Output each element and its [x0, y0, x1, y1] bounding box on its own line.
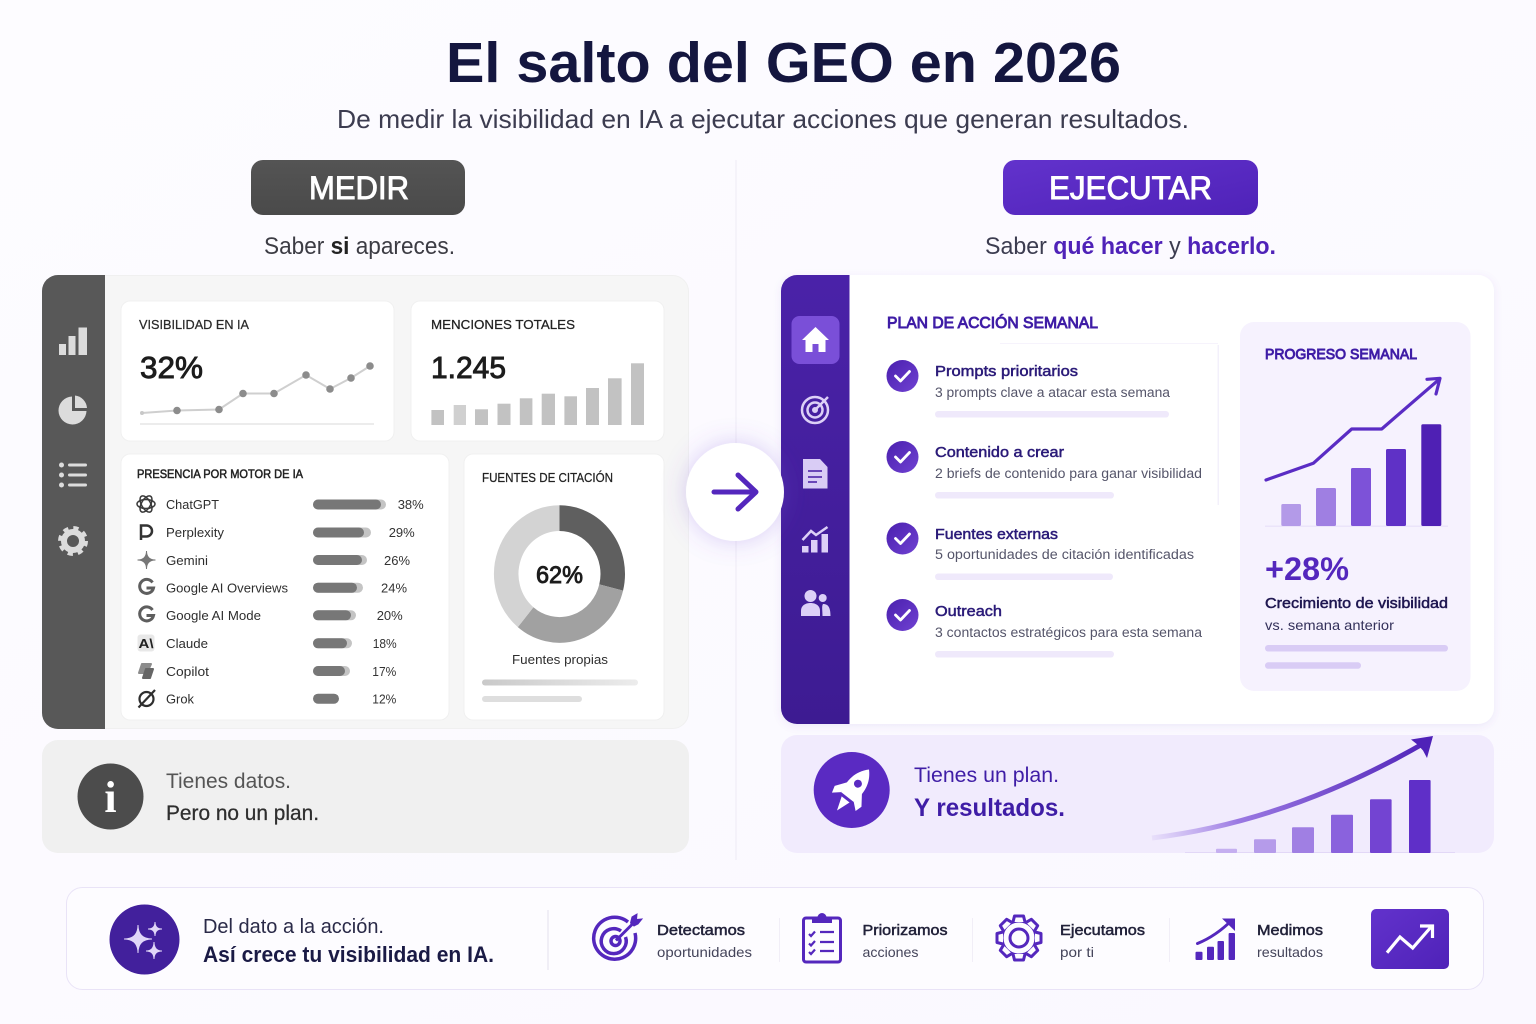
badge: MEDIR: MEDIR: [309, 170, 409, 206]
icon: sparkles: [110, 904, 180, 974]
banner: del dato a la acción: Así crece tu visibilidad en IA.: [203, 942, 494, 967]
row: Claude: [138, 634, 397, 652]
step: ejecutamos: [997, 916, 1145, 960]
step: ejecutamos: Ejecutamos: [1060, 922, 1145, 939]
bar chart: [431, 363, 644, 425]
icon: home: [792, 316, 840, 364]
row: Gemini: [138, 551, 410, 569]
card: menciones: MENCIONES TOTALES: [431, 317, 575, 332]
row: ChatGPT: [137, 494, 424, 514]
row: Claude: 18%: [373, 636, 397, 651]
tagline: ejecutar: Saber qué hacer y hacerlo.: [985, 233, 1276, 260]
icon: pie: [59, 396, 87, 424]
row: Google AI Mode: Google AI Mode: [166, 608, 261, 623]
subtitle: De medir la visibilidad en IA a ejecutar acciones que generan resultados.: [337, 104, 1189, 134]
bar chart with growth arrow: [1152, 736, 1455, 853]
callout: tienes datos: Pero no un plan.: [166, 802, 319, 825]
sidebar: medir: [42, 275, 105, 729]
step: medimos: resultados: [1257, 944, 1323, 960]
step: priorizamos: acciones: [862, 944, 918, 960]
card: progreso semanal: vs. semana anterior: [1265, 617, 1394, 633]
row: ChatGPT: 38%: [398, 497, 424, 512]
icon: info: i: [104, 773, 117, 822]
card: presencia por motor: PRESENCIA POR MOTOR DE IA: [137, 467, 303, 481]
icon: info: [78, 764, 144, 830]
step: detectamos: Detectamos: [657, 922, 745, 939]
item: prompts: 3 prompts clave a atacar esta semana: [935, 385, 1170, 400]
sidebar: ejecutar: [781, 275, 850, 724]
card: fuentes de citación: 62%: [536, 562, 583, 589]
card: visibilidad: 32%: [140, 350, 203, 385]
row: Claude: Claude: [166, 636, 208, 651]
row: Perplexity: 29%: [389, 525, 415, 540]
card: progreso semanal: Crecimiento de visibilidad: [1265, 595, 1448, 612]
card: visibilidad: VISIBILIDAD EN IA: [139, 317, 249, 332]
row: Claude: A\: [138, 636, 154, 651]
item: fuentes: 5 oportunidades de citación identificadas: [935, 547, 1194, 562]
step: ejecutamos: por ti: [1060, 944, 1094, 960]
callout: tienes datos: Tienes datos.: [166, 770, 291, 793]
step: medimos: Medimos: [1257, 922, 1323, 939]
row: Gemini: 26%: [384, 553, 410, 568]
card: fuentes de citación: FUENTES DE CITACIÓN: [482, 470, 613, 485]
row: Perplexity: [141, 525, 415, 540]
step: detectamos: oportunidades: [657, 944, 752, 960]
card: menciones: [411, 301, 664, 441]
row: Perplexity: Perplexity: [166, 525, 225, 540]
banner: del dato a la acción: [66, 888, 1484, 990]
item: contenido: 2 briefs de contenido para ganar visibilidad: [935, 466, 1202, 481]
row: Grok: 12%: [372, 692, 397, 706]
title: El salto del GEO en 2026: [446, 31, 1121, 95]
step: medimos: [1196, 918, 1323, 960]
panel: ejecutar dashboard: [781, 275, 1494, 724]
card: presencia por motor: [121, 454, 449, 720]
badge: EJECUTAR: EJECUTAR: [1049, 170, 1212, 206]
row: Google AI Overviews: [140, 579, 407, 596]
row: Copilot: 17%: [372, 664, 397, 679]
bar chart with trend arrow: [1265, 378, 1448, 527]
icon: document: [803, 459, 828, 488]
callout: tienes datos: [42, 740, 689, 853]
row: Google AI Overviews: Google AI Overviews: [166, 580, 288, 596]
item: prompts: Prompts prioritarios: [935, 363, 1078, 380]
icon: rocket: [814, 752, 890, 828]
card: progreso semanal: [1240, 322, 1470, 691]
card: progreso semanal: PROGRESO SEMANAL: [1265, 347, 1417, 363]
row: Google AI Mode: [140, 607, 403, 623]
row: Grok: [138, 690, 397, 708]
icon: bars: [59, 328, 87, 355]
row: Grok: Grok: [166, 692, 194, 706]
step: priorizamos: [804, 913, 948, 962]
row: Copilot: [139, 664, 397, 679]
card: fuentes de citación: Fuentes propias: [512, 652, 609, 667]
row: Google AI Overviews: 24%: [381, 580, 407, 596]
row: Copilot: Copilot: [166, 664, 209, 679]
line chart: [140, 362, 374, 415]
item: fuentes: [886, 522, 1194, 580]
step: detectamos: [594, 914, 752, 960]
icon: trend tile: [1371, 909, 1449, 969]
icon: target: [802, 397, 828, 423]
badge: MEDIR: [251, 160, 465, 215]
item: fuentes: Fuentes externas: [935, 526, 1058, 543]
step: priorizamos: Priorizamos: [862, 922, 948, 939]
banner: del dato a la acción: Del dato a la acción.: [203, 916, 384, 938]
badge: EJECUTAR: [1003, 160, 1258, 215]
donut chart: [506, 518, 613, 630]
item: prompts: [886, 360, 1170, 418]
card: menciones: 1.245: [431, 350, 506, 385]
item: contenido: Contenido a crear: [935, 444, 1064, 461]
panel: medir dashboard: [42, 275, 688, 729]
arrow: medir to ejecutar: [686, 443, 784, 541]
card: fuentes de citación: [464, 454, 664, 720]
icon: growth chart: [802, 527, 828, 552]
row: ChatGPT: ChatGPT: [166, 497, 219, 512]
item: contenido: [886, 441, 1202, 498]
callout: tienes un plan: Y resultados.: [914, 794, 1065, 822]
heading: plan de acción: PLAN DE ACCIÓN SEMANAL: [887, 313, 1098, 332]
callout: tienes un plan: Tienes un plan.: [914, 764, 1059, 787]
icon: list: [59, 462, 87, 488]
tagline: medir: Saber si apareces.: [264, 233, 455, 260]
row: Gemini: Gemini: [166, 553, 208, 568]
row: Google AI Mode: 20%: [377, 608, 403, 623]
icon: gear: [60, 528, 86, 554]
card: progreso semanal: +28%: [1265, 551, 1349, 587]
card: visibilidad: [121, 301, 394, 441]
callout: tienes un plan: [781, 735, 1494, 853]
item: outreach: Outreach: [935, 603, 1002, 620]
item: outreach: [886, 599, 1203, 658]
icon: users: [801, 590, 830, 616]
item: outreach: 3 contactos estratégicos para esta semana: [935, 625, 1203, 640]
